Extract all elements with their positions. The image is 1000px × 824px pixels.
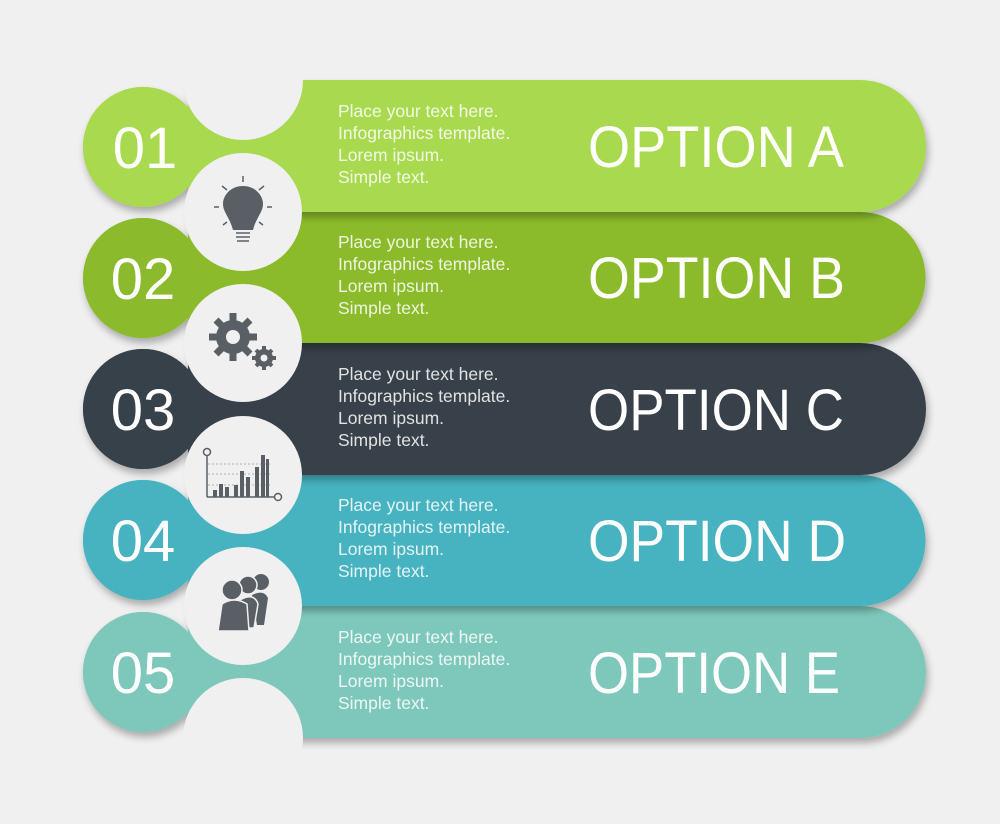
option titles: OPTION B	[588, 246, 845, 311]
body texts: Place your text here.	[338, 495, 498, 515]
option titles: OPTION A	[588, 115, 844, 180]
body texts: Simple text.	[338, 167, 429, 187]
body texts: Place your text here.	[338, 627, 498, 647]
body texts: Place your text here.	[338, 364, 498, 384]
numbers: 03	[111, 378, 175, 443]
numbers: 05	[111, 641, 175, 706]
numbers: 04	[111, 509, 175, 574]
option titles: OPTION C	[588, 378, 844, 443]
body texts: Infographics template.	[338, 254, 510, 274]
band D	[83, 475, 926, 606]
band E	[83, 606, 926, 738]
band A	[83, 80, 926, 212]
numbers: 02	[111, 247, 175, 312]
body texts: Place your text here.	[338, 101, 498, 121]
body texts: Infographics template.	[338, 649, 510, 669]
option titles	[588, 115, 846, 706]
option titles: OPTION E	[588, 641, 840, 706]
icon: people	[218, 574, 269, 631]
icon: lightbulb	[214, 176, 272, 241]
numbers	[111, 116, 177, 706]
body texts: Simple text.	[338, 693, 429, 713]
icon: gears	[209, 313, 276, 370]
number circles	[83, 87, 203, 732]
body texts: Lorem ipsum.	[338, 671, 444, 691]
option titles: OPTION D	[588, 509, 846, 574]
body texts: Infographics template.	[338, 123, 510, 143]
band C	[83, 343, 926, 475]
body texts: Lorem ipsum.	[338, 276, 444, 296]
body texts: Infographics template.	[338, 386, 510, 406]
body texts: Simple text.	[338, 430, 429, 450]
body texts: Lorem ipsum.	[338, 145, 444, 165]
icon: bar chart	[204, 448, 282, 500]
cutout circles	[183, 20, 303, 798]
body texts: Infographics template.	[338, 517, 510, 537]
body texts: Simple text.	[338, 561, 429, 581]
body texts: Lorem ipsum.	[338, 408, 444, 428]
body texts: Place your text here.	[338, 232, 498, 252]
band B	[83, 212, 926, 343]
body texts: Lorem ipsum.	[338, 539, 444, 559]
body texts	[338, 101, 510, 713]
numbers: 01	[113, 116, 177, 181]
body texts: Simple text.	[338, 298, 429, 318]
